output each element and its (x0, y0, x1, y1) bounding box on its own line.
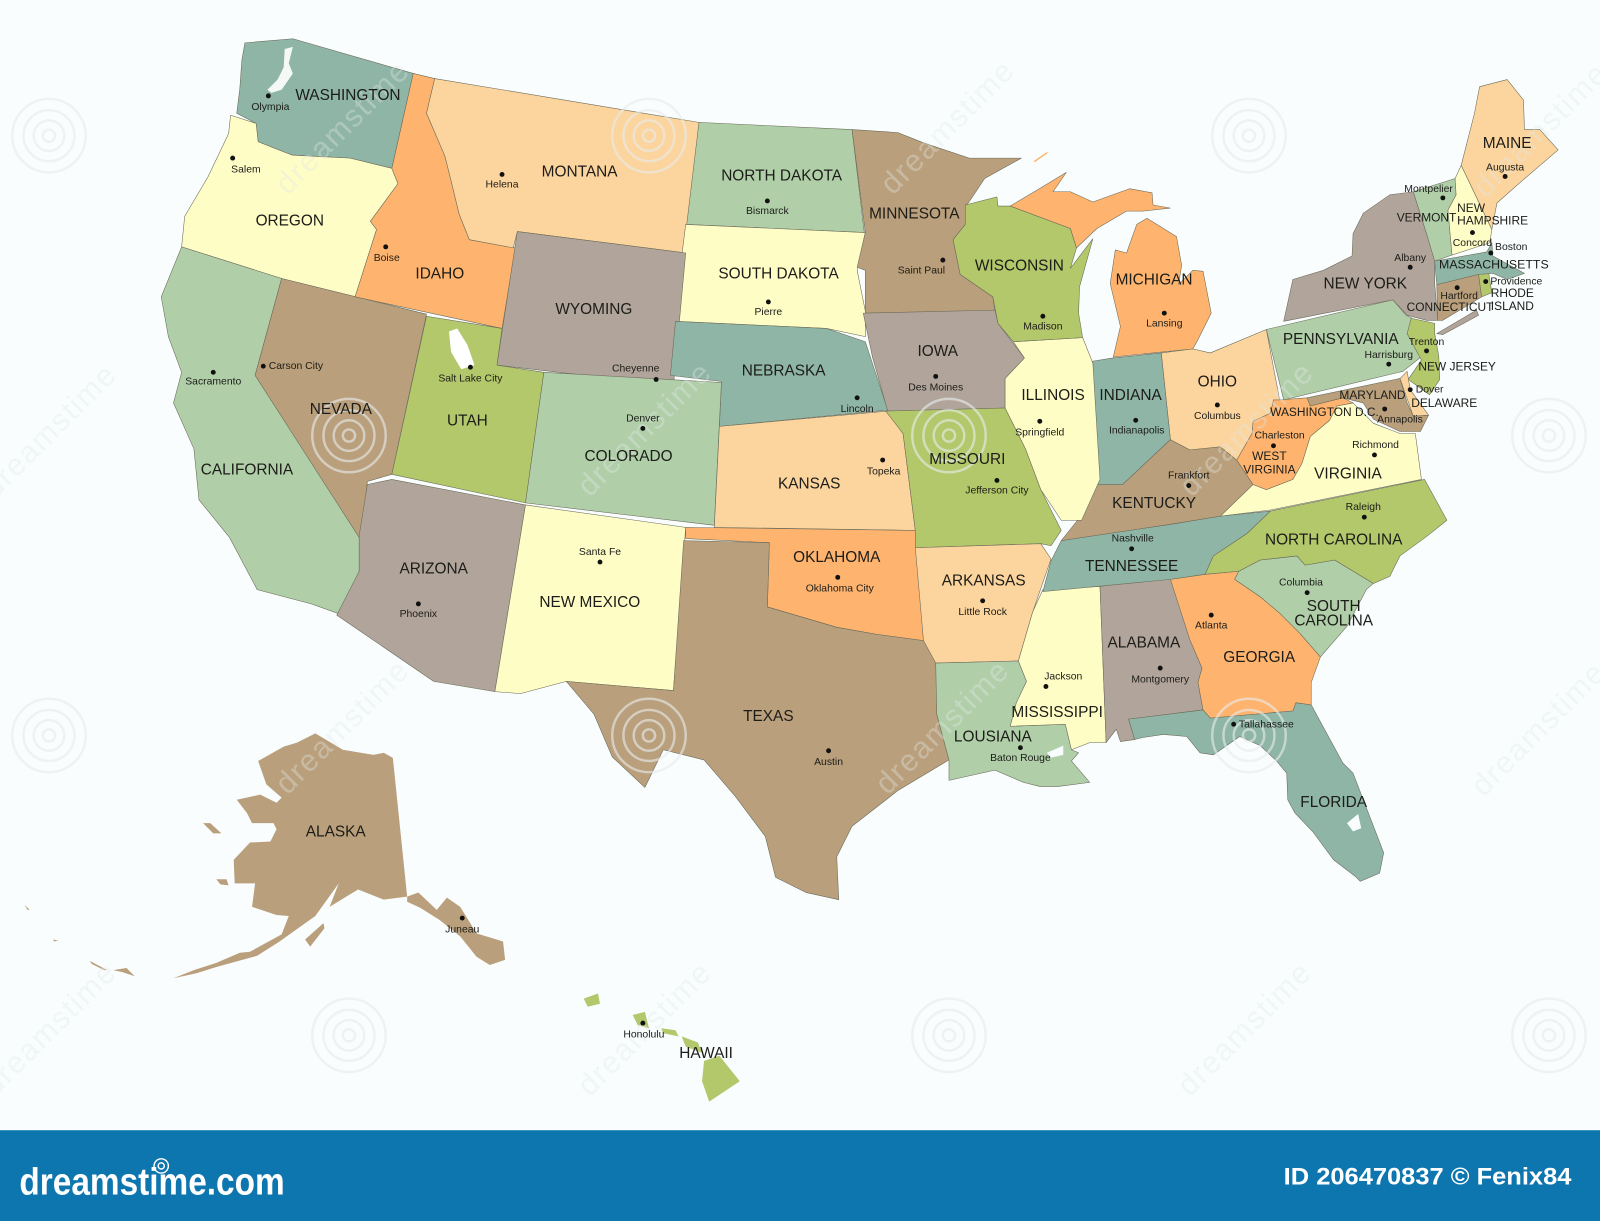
capital labels: Charleston (1254, 431, 1305, 442)
capital labels: Harrisburg (1365, 350, 1413, 361)
state name labels: MAINE (1483, 135, 1532, 152)
state: Iowa (863, 310, 1024, 411)
state name labels: MONTANA (542, 163, 618, 180)
state: Alabama (1100, 576, 1203, 743)
state: Montana (427, 79, 699, 253)
state: Hawaii (584, 994, 740, 1102)
state: Idaho (355, 73, 515, 328)
capital labels: Dover (1416, 385, 1444, 396)
state name labels: MICHIGAN (1116, 272, 1193, 289)
state: Florida (1129, 703, 1384, 881)
state: Wisconsin (953, 197, 1093, 342)
state name labels: WASHINGTON (295, 87, 401, 104)
capital labels: Richmond (1352, 440, 1399, 451)
watermark: diagonal text: dreamstime (269, 654, 415, 801)
small state name labels: ISLAND (1491, 299, 1534, 313)
footer credit: ID 206470837 © Fenix84 (1284, 1163, 1572, 1190)
capital labels: Juneau (445, 924, 480, 935)
small state name labels: MASSACHUSETTS (1439, 257, 1549, 271)
capital labels: Carson City (269, 361, 324, 372)
state name labels: ARKANSAS (942, 573, 1026, 590)
state: New York, Long Island (1437, 310, 1479, 335)
state: Virginia (1220, 403, 1421, 516)
capital labels: Jackson (1044, 671, 1083, 682)
state: Delaware (1400, 371, 1429, 416)
small state name labels (1243, 201, 1549, 476)
footer banner (0, 1130, 1600, 1221)
small state name labels: NEW (1457, 201, 1486, 215)
capital labels: Bismarck (746, 206, 790, 217)
feature: Lake Pontchartrain (1047, 746, 1063, 758)
state name labels: SOUTH DAKOTA (718, 265, 839, 282)
capital labels: Austin (814, 757, 843, 768)
state: Texas (566, 541, 949, 900)
state name labels: LOUSIANA (954, 729, 1033, 746)
capital labels: Frankfort (1168, 470, 1210, 481)
state name labels: NEVADA (310, 401, 373, 418)
state: Minnesota (852, 130, 1021, 313)
watermark: diagonal text: dreamstime (1171, 956, 1317, 1103)
state: New Mexico (495, 505, 686, 694)
capital labels: Hartford (1440, 291, 1478, 302)
state: Maine (1461, 80, 1558, 230)
watermark: spiral logos (12, 99, 1586, 1072)
capital labels: Cheyenne (612, 363, 660, 374)
watermark: diagonal text: dreamstime (874, 54, 1020, 201)
state name labels: WYOMING (555, 301, 632, 318)
state: Wyoming (497, 232, 686, 386)
state: Maryland (1307, 378, 1429, 431)
state: Mississippi (1010, 587, 1106, 750)
small state name labels: HAMPSHIRE (1457, 213, 1528, 227)
state name labels: ILLINOIS (1021, 387, 1085, 404)
capital labels: Salt Lake City (438, 374, 503, 384)
state: Massachusetts (1435, 243, 1524, 285)
small state name labels: RHODE (1491, 286, 1534, 300)
state: Arkansas (915, 544, 1051, 663)
feature: Puget Sound (267, 47, 293, 93)
watermark: diagonal text: dreamstime (269, 54, 415, 201)
state: Georgia (1170, 571, 1320, 718)
capital labels: Baton Rouge (990, 753, 1051, 764)
state name labels: NEW YORK (1324, 276, 1408, 293)
capital labels: Lincoln (841, 404, 874, 415)
state name labels: MISSISSIPPI (1011, 704, 1103, 721)
small state name labels: DELAWARE (1411, 396, 1477, 410)
state name labels: WISCONSIN (975, 257, 1064, 274)
capital labels: Olympia (251, 102, 290, 113)
state: Kentucky (1061, 440, 1253, 541)
state: Indiana (1093, 353, 1170, 485)
state name labels: HAWAII (679, 1045, 733, 1062)
small state name labels: VIRGINIA (1243, 462, 1296, 476)
state: Connecticut (1437, 274, 1482, 320)
state: Tennessee (1043, 511, 1270, 592)
state: Rhode Island (1479, 273, 1492, 297)
small state name labels: MARYLAND (1339, 388, 1406, 402)
state name labels: ARIZONA (399, 560, 469, 577)
state name labels: UTAH (447, 412, 488, 429)
state: Pennsylvania (1266, 300, 1423, 400)
capital labels: Providence (1490, 277, 1543, 288)
state: West Virginia (1237, 398, 1353, 490)
capital labels: Annapolis (1377, 414, 1423, 425)
state name labels: IDAHO (415, 265, 464, 282)
capital labels: Jefferson City (965, 486, 1029, 497)
state name labels: MINNESOTA (869, 205, 960, 222)
footer logo spiral (154, 1159, 168, 1173)
state: Nevada (255, 278, 427, 538)
state name labels: INDIANA (1099, 387, 1163, 404)
state: Nebraska (670, 321, 888, 426)
capital labels (185, 102, 1543, 1040)
state: Illinois (1005, 338, 1100, 520)
small state name labels: WEST (1252, 449, 1287, 463)
state name labels: COLORADO (585, 448, 673, 465)
state: New Hampshire (1448, 165, 1492, 255)
capital labels: Little Rock (958, 607, 1008, 618)
state: Arizona (337, 479, 526, 692)
state: Utah (392, 316, 544, 503)
capital labels: Atlanta (1195, 620, 1228, 631)
state name labels: KENTUCKY (1112, 495, 1196, 512)
state name labels: IOWA (918, 343, 959, 360)
state: Vermont (1413, 179, 1456, 261)
state name labels: CALIFORNIA (201, 461, 294, 478)
capital labels: Denver (626, 413, 660, 424)
capital labels: Helena (486, 180, 519, 191)
capital labels: Tallahassee (1239, 719, 1294, 730)
small state name labels: WASHINGTON D.C. (1270, 405, 1379, 419)
state name labels: CAROLINA (1294, 612, 1374, 629)
state: Alaska (24, 733, 505, 978)
state name labels (201, 87, 1532, 1062)
state: Ohio (1161, 329, 1280, 460)
feature: Great Salt Lake (449, 328, 474, 369)
small state name labels: NEW JERSEY (1418, 359, 1496, 373)
state name labels: OREGON (256, 212, 324, 229)
capital labels: Albany (1394, 253, 1427, 264)
state: California (161, 247, 359, 614)
state name labels: TENNESSEE (1085, 558, 1178, 575)
state: Missouri (886, 408, 1061, 548)
capital labels: Lansing (1146, 318, 1183, 329)
state: Washington (237, 39, 413, 168)
state name labels: NEBRASKA (742, 362, 826, 379)
state name labels: FLORIDA (1300, 794, 1368, 811)
capital labels: Salem (231, 164, 261, 175)
state: North Carolina (1205, 479, 1447, 583)
state name labels: VIRGINIA (1314, 465, 1382, 482)
state: North Dakota (687, 122, 864, 233)
state: New York (1284, 192, 1438, 321)
watermark: diagonal text: dreamstime (869, 654, 1015, 801)
capital labels: Boston (1495, 242, 1528, 253)
capital labels: Indianapolis (1109, 426, 1164, 437)
feature: Lake Okeechobee (1347, 814, 1361, 831)
capital labels: Nashville (1112, 534, 1154, 545)
state: South Dakota (673, 224, 865, 337)
capital labels: Madison (1023, 321, 1063, 332)
state name labels: GEORGIA (1223, 649, 1296, 666)
state name labels: TEXAS (743, 708, 794, 725)
capital labels: Oklahoma City (806, 584, 875, 595)
state: Michigan upper peninsula (1010, 152, 1170, 248)
capital labels: Trenton (1409, 337, 1444, 348)
state name labels: NEW MEXICO (539, 594, 640, 611)
capital labels: Topeka (867, 466, 901, 477)
state name labels: NORTH CAROLINA (1265, 532, 1403, 549)
state: South Carolina (1235, 556, 1373, 657)
state: Colorado (526, 372, 721, 525)
state name labels: NORTH DAKOTA (721, 168, 843, 185)
state name labels: OKLAHOMA (793, 549, 881, 566)
state name labels: SOUTH (1307, 598, 1361, 615)
state name labels: PENNSYLVANIA (1283, 331, 1399, 348)
capital labels: Columbus (1194, 411, 1241, 422)
footer logo: dreamstime.com: dreamstime.com (19, 1160, 285, 1202)
capital labels: Saint Paul (898, 265, 945, 276)
watermark: diagonal text: dreamstime (571, 356, 717, 503)
state: Oregon (182, 115, 398, 297)
state name labels: ALABAMA (1108, 635, 1181, 652)
state: Louisiana (936, 661, 1090, 786)
state: Oklahoma (686, 527, 923, 641)
state: Michigan lower peninsula (1110, 218, 1211, 357)
capital labels: Phoenix (400, 609, 438, 620)
state: New Jersey (1407, 318, 1440, 395)
capital labels: Santa Fe (579, 547, 621, 558)
state: Kansas (714, 411, 915, 530)
state name labels: KANSAS (778, 476, 840, 493)
capital labels: Springfield (1015, 428, 1065, 439)
capital labels: Columbia (1279, 578, 1323, 589)
capital labels: Honolulu (623, 1029, 665, 1040)
capital labels: Sacramento (185, 377, 241, 388)
capital labels: Augusta (1486, 162, 1524, 173)
capital labels: Raleigh (1346, 502, 1381, 513)
small state name labels: VERMONT (1397, 210, 1457, 224)
small state name labels: CONNECTICUT (1407, 300, 1494, 314)
capital labels: Pierre (755, 307, 782, 318)
watermark: diagonal text: dreamstime (1173, 356, 1319, 503)
state name labels: OHIO (1198, 374, 1237, 391)
state name labels: ALASKA (306, 823, 366, 840)
capital labels: Montpelier (1404, 184, 1453, 195)
capital labels: Boise (374, 253, 400, 264)
capital dots (211, 93, 1508, 1026)
watermark: diagonal text: dreamstime (571, 956, 717, 1103)
capital labels: Montgomery (1131, 674, 1190, 685)
capital labels: Concord (1453, 238, 1492, 249)
state name labels: MISSOURI (929, 451, 1005, 468)
capital labels: Des Moines (908, 383, 963, 394)
